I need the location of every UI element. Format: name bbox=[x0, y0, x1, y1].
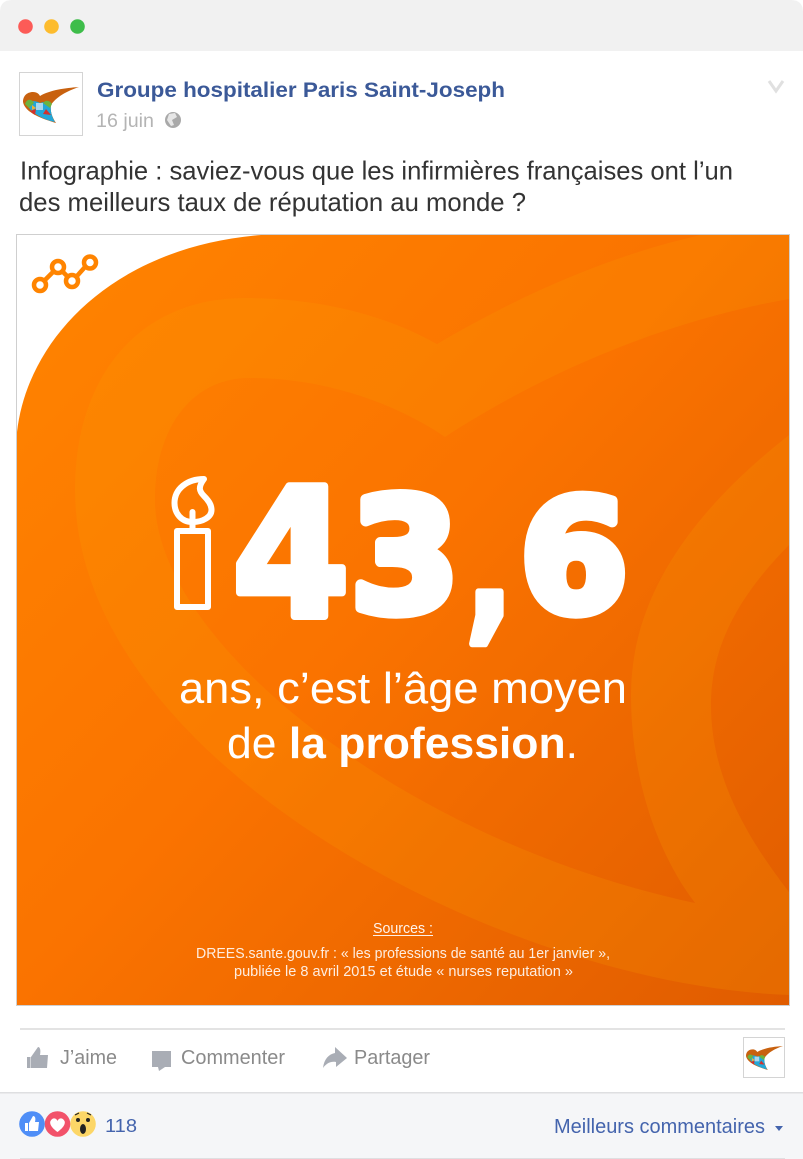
icon: wow reaction bbox=[70, 1111, 96, 1137]
big number: 3 bbox=[350, 466, 460, 649]
action: share: Partager bbox=[354, 1046, 430, 1069]
action: comment: Commenter bbox=[181, 1046, 285, 1069]
comment sort link: Meilleurs commentaires bbox=[554, 1116, 765, 1138]
icon: red window dot bbox=[18, 19, 33, 34]
commenter avatar logo bbox=[744, 1038, 784, 1078]
headline line one: ans, c’est l’âge moyen bbox=[179, 664, 627, 713]
orange background shape bbox=[17, 234, 789, 1006]
headline line two: de la profession. bbox=[227, 719, 578, 768]
reactions footer bbox=[0, 1092, 803, 1159]
sources text: publiée le 8 avril 2015 et étude « nurses reputation » bbox=[234, 964, 573, 980]
icon: love reaction bbox=[45, 1111, 70, 1137]
action: share bbox=[323, 1046, 430, 1069]
post message: des meilleurs taux de réputation au monde ? bbox=[19, 187, 526, 217]
action bar bbox=[27, 1038, 784, 1078]
sources text bbox=[196, 946, 610, 980]
post date: 16 juin bbox=[96, 110, 154, 132]
reaction count: 118 bbox=[105, 1115, 137, 1136]
big number: 4 bbox=[232, 451, 350, 658]
action: like: J’aime bbox=[60, 1046, 117, 1069]
big number bbox=[232, 451, 628, 659]
icon: dropdown caret bbox=[775, 1126, 783, 1131]
icon: like reaction bbox=[19, 1111, 45, 1137]
icon: line chart logo bbox=[34, 256, 96, 291]
post header bbox=[20, 72, 783, 136]
page name: Groupe hospitalier Paris Saint-Joseph bbox=[97, 78, 505, 102]
icon: candle bbox=[174, 479, 212, 607]
big number: 6 bbox=[520, 467, 628, 648]
icon: yellow window dot bbox=[44, 19, 59, 34]
divider above actions bbox=[20, 1028, 785, 1030]
big number: , bbox=[465, 476, 514, 659]
post message bbox=[19, 156, 733, 217]
sources heading: Sources : bbox=[373, 921, 433, 937]
heart band shape bbox=[207, 235, 789, 995]
icon: globe bbox=[165, 112, 181, 128]
window title bar bbox=[0, 0, 803, 51]
post message: Infographie : saviez-vous que les infirmières françaises ont l’un bbox=[20, 156, 733, 186]
page avatar logo bbox=[20, 72, 82, 136]
icon: chevron menu bbox=[769, 81, 783, 91]
panel: infographic image bbox=[16, 234, 790, 1006]
icon: green window dot bbox=[70, 19, 85, 34]
sources text: DREES.sante.gouv.fr : « les professions de santé au 1er janvier », bbox=[196, 946, 610, 962]
action: like bbox=[27, 1046, 117, 1069]
